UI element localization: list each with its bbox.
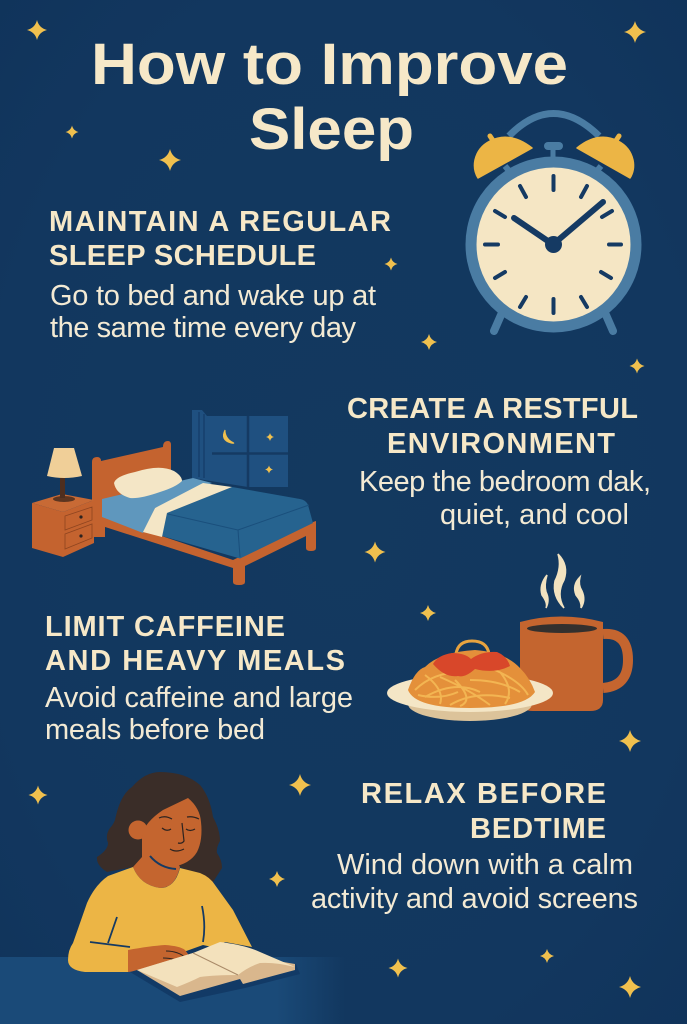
icon: alarm clock bbox=[466, 114, 642, 332]
text: go to bed and wake up: the same time every day bbox=[50, 312, 356, 344]
text: avoid caffeine and large meals bbox=[45, 682, 353, 746]
heading: limit caffeine and heavy meals: LIMIT CAFFEINE bbox=[45, 611, 285, 643]
illustration: woman reading a book bbox=[68, 772, 300, 1002]
heading: maintain a regular sleep schedule: MAINTAIN A REGULAR bbox=[49, 206, 391, 238]
icon part: clock ticks bbox=[485, 176, 621, 313]
text: go to bed and wake up bbox=[50, 280, 376, 344]
heading: maintain a regular sleep schedule: SLEEP SCHEDULE bbox=[49, 240, 316, 272]
text: avoid caffeine and large meals: meals before bed bbox=[45, 714, 265, 746]
sweater bbox=[68, 867, 252, 972]
icon part: lamp bbox=[47, 448, 82, 502]
heading: create a restful environment: ENVIRONMENT bbox=[387, 428, 615, 460]
text: keep the bedroom dark: quiet, and cool bbox=[440, 499, 629, 531]
heading: limit caffeine and heavy meals: AND HEAVY MEALS bbox=[45, 645, 345, 677]
icon part: sheet bbox=[102, 478, 212, 533]
icon part: window with curtain bbox=[192, 410, 288, 487]
heading: create a restful environment: CREATE A RESTFUL bbox=[347, 393, 638, 425]
face bbox=[128, 798, 202, 869]
heading: relax before bedtime: BEDTIME bbox=[470, 813, 606, 845]
heading: relax before bedtime bbox=[361, 778, 606, 845]
icon part: headboard bbox=[92, 441, 171, 537]
heading: create a restful environment bbox=[347, 393, 638, 460]
panel: caffeine and heavy meals bbox=[45, 554, 628, 746]
icon part: left bell bbox=[474, 137, 532, 178]
title: Sleep bbox=[249, 97, 414, 162]
icon part: right bell bbox=[577, 137, 634, 178]
panel: regular sleep schedule bbox=[49, 114, 642, 344]
icon: bed with nightstand and window bbox=[32, 410, 316, 585]
icon part: nightstand bbox=[32, 494, 94, 557]
title: How to Improve bbox=[91, 32, 568, 97]
heading: maintain a regular sleep schedule bbox=[49, 206, 391, 272]
hand bbox=[128, 945, 190, 972]
icon part: blanket bbox=[162, 487, 313, 558]
icon part: folded white sheet bbox=[143, 483, 232, 537]
icon part: bed frame bbox=[102, 516, 316, 585]
hair bbox=[97, 772, 222, 882]
text: wind down with a calm activity: Wind down with a calm bbox=[337, 849, 633, 881]
text: avoid caffeine and large meals: Avoid caffeine and large bbox=[45, 682, 353, 714]
text: wind down with a calm activity: activity and avoid screens bbox=[311, 883, 638, 915]
icon: plate of spaghetti bbox=[387, 641, 553, 721]
panel: restful environment bbox=[32, 393, 651, 585]
open book bbox=[130, 942, 300, 1002]
text: go to bed and wake up: Go to bed and wake up at bbox=[50, 280, 376, 312]
text: wind down with a calm activity bbox=[311, 849, 638, 915]
icon part: clock hands bbox=[514, 202, 603, 244]
text: keep the bedroom dark: Keep the bedroom dak, bbox=[359, 466, 651, 498]
title bbox=[91, 32, 568, 162]
heading: relax before bedtime: RELAX BEFORE bbox=[361, 778, 606, 810]
table surface bbox=[0, 957, 345, 1024]
icon: steam bbox=[541, 554, 584, 608]
heading: limit caffeine and heavy meals bbox=[45, 611, 345, 677]
icon part: pillow bbox=[114, 468, 182, 498]
icon: coffee mug bbox=[520, 616, 628, 711]
text: keep the bedroom dark bbox=[359, 466, 651, 531]
panel: relax before bedtime bbox=[0, 772, 638, 1024]
neck bbox=[133, 835, 180, 888]
